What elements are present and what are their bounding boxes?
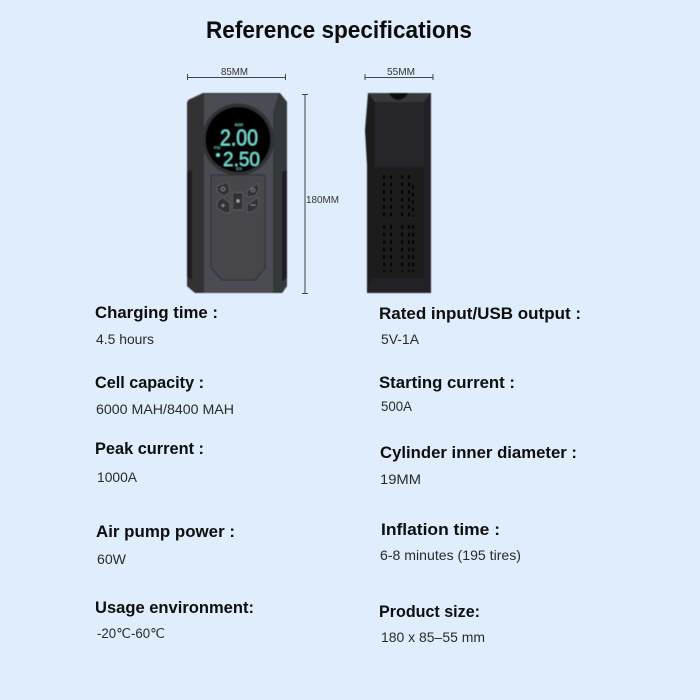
side body — [365, 93, 431, 293]
side dimension: depth 55MM: 55MM — [387, 66, 415, 78]
spec: product size — [379, 603, 485, 645]
spec: peak current: Peak current : — [95, 440, 204, 458]
spec: air pump power: 60W — [97, 551, 127, 567]
spec: inflation time: 6-8 minutes (195 tires) — [380, 547, 521, 563]
side top nozzle — [389, 93, 408, 100]
front control panel — [211, 175, 265, 280]
button: bottom left — [217, 197, 230, 213]
side vent holes — [384, 175, 413, 272]
front dimension: width 85MM: 85MM — [221, 66, 248, 78]
spec: cell capacity: 6000 MAH/8400 MAH — [96, 401, 234, 417]
side grille panel — [372, 167, 424, 278]
spec: cylinder inner diameter: 19MM — [380, 471, 421, 487]
spec: charging time: Charging time : — [95, 304, 218, 322]
pump body — [187, 93, 287, 293]
front dimension: height 180MM: 180MM — [306, 194, 339, 206]
front dimension: height 180MM — [302, 94, 339, 294]
side view of air pump — [365, 93, 431, 293]
spec: usage environment: -20℃-60℃ — [97, 625, 165, 641]
spec: cylinder inner diameter — [380, 444, 577, 487]
button: light centre — [232, 192, 243, 210]
spec: cell capacity — [95, 374, 234, 417]
spec: air pump power: Air pump power : — [96, 523, 235, 541]
spec: inflation time — [380, 521, 521, 563]
spec: starting current: Starting current : — [379, 374, 515, 392]
spec: starting current — [379, 374, 515, 414]
spec: product size: 180 x 85–55 mm — [381, 629, 485, 645]
spec: usage environment — [95, 599, 254, 641]
spec: usage environment: Usage environment: — [95, 599, 254, 617]
button: bottom right — [247, 197, 259, 213]
spec: charging time — [95, 304, 218, 347]
spec: rated input/USB output — [379, 305, 581, 347]
spec: peak current: 1000A — [97, 469, 138, 485]
spec: charging time: 4.5 hours — [96, 331, 154, 347]
side upper panel — [375, 102, 424, 167]
spec: rated input/USB output: Rated input/USB output : — [379, 305, 581, 323]
title: Reference specifications — [206, 17, 472, 44]
display screen: 2.00 — [220, 124, 258, 150]
spec: inflation time: Inflation time : — [381, 521, 500, 539]
display screen — [206, 107, 270, 172]
side bottom band — [367, 278, 431, 293]
button: top left — [217, 182, 230, 196]
spec: starting current: 500A — [381, 398, 413, 414]
side dimension: depth 55MM — [365, 66, 433, 80]
display screen: BAR — [235, 122, 243, 127]
front view of air pump — [187, 93, 287, 293]
spec: product size: Product size: — [379, 603, 480, 621]
button: top right — [247, 183, 259, 197]
display screen: 2.50 — [223, 149, 260, 171]
front dimension: width 85MM — [188, 66, 286, 80]
display bezel — [202, 104, 274, 176]
display screen: PSI — [214, 145, 220, 150]
spec: cylinder inner diameter: Cylinder inner diameter : — [380, 444, 577, 462]
spec: rated input/USB output: 5V-1A — [381, 331, 420, 347]
spec: air pump power — [96, 523, 235, 567]
spec: peak current — [95, 440, 204, 485]
display screen: 5% — [236, 166, 242, 171]
spec: cell capacity: Cell capacity : — [95, 374, 204, 392]
